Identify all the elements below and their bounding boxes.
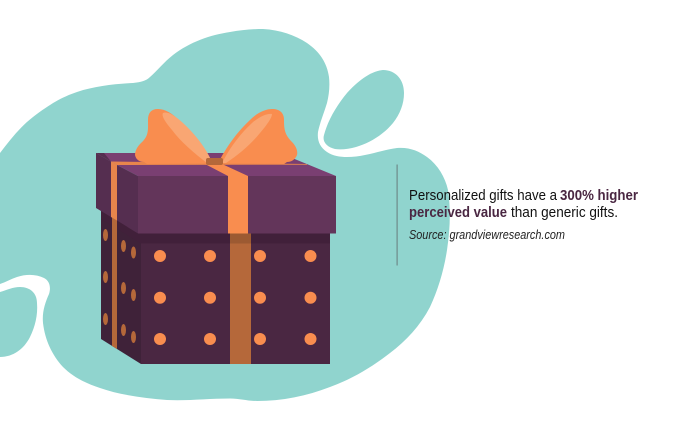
bow knot bbox=[206, 158, 223, 165]
lid back dark corner bbox=[96, 153, 111, 162]
statement line two: than generic gifts. bbox=[511, 205, 618, 221]
lid top bbox=[96, 153, 336, 176]
bow left loop bbox=[135, 109, 212, 164]
lid left front panel bbox=[117, 165, 138, 234]
vertical divider bbox=[396, 164, 398, 266]
lid front ribbon bbox=[228, 176, 248, 234]
source line: Source: grandviewresearch.com bbox=[409, 228, 565, 242]
lid shadow on body bbox=[101, 205, 330, 244]
background blobs bbox=[0, 29, 450, 401]
box body front bbox=[141, 233, 330, 364]
statement line two: perceived value bbox=[409, 205, 507, 221]
callout text bbox=[409, 188, 638, 242]
statement line one: Personalized gifts have a bbox=[409, 188, 558, 204]
front ribbon shadow bbox=[230, 233, 251, 244]
large teal blob bbox=[0, 29, 450, 401]
gift box bbox=[96, 109, 336, 364]
bow bbox=[135, 109, 297, 165]
front ribbon bbox=[230, 233, 251, 364]
lid front bbox=[138, 176, 336, 234]
bow right highlight bbox=[222, 114, 272, 163]
box body left side bbox=[101, 211, 141, 364]
lid cross ribbon back bbox=[111, 162, 307, 165]
front polka dots bbox=[154, 250, 316, 345]
side polka dots bbox=[103, 229, 136, 343]
statement line one: 300% higher bbox=[560, 188, 638, 204]
statement line two bbox=[409, 205, 618, 221]
small right teal blob bbox=[324, 70, 404, 149]
lid top ribbon bbox=[205, 164, 248, 176]
lid left side bbox=[96, 153, 111, 217]
bow right loop bbox=[218, 109, 297, 164]
lid side ribbon bbox=[111, 162, 117, 220]
bow left highlight bbox=[163, 113, 212, 163]
small left teal blob bbox=[0, 287, 37, 357]
side ribbon bbox=[112, 215, 117, 349]
